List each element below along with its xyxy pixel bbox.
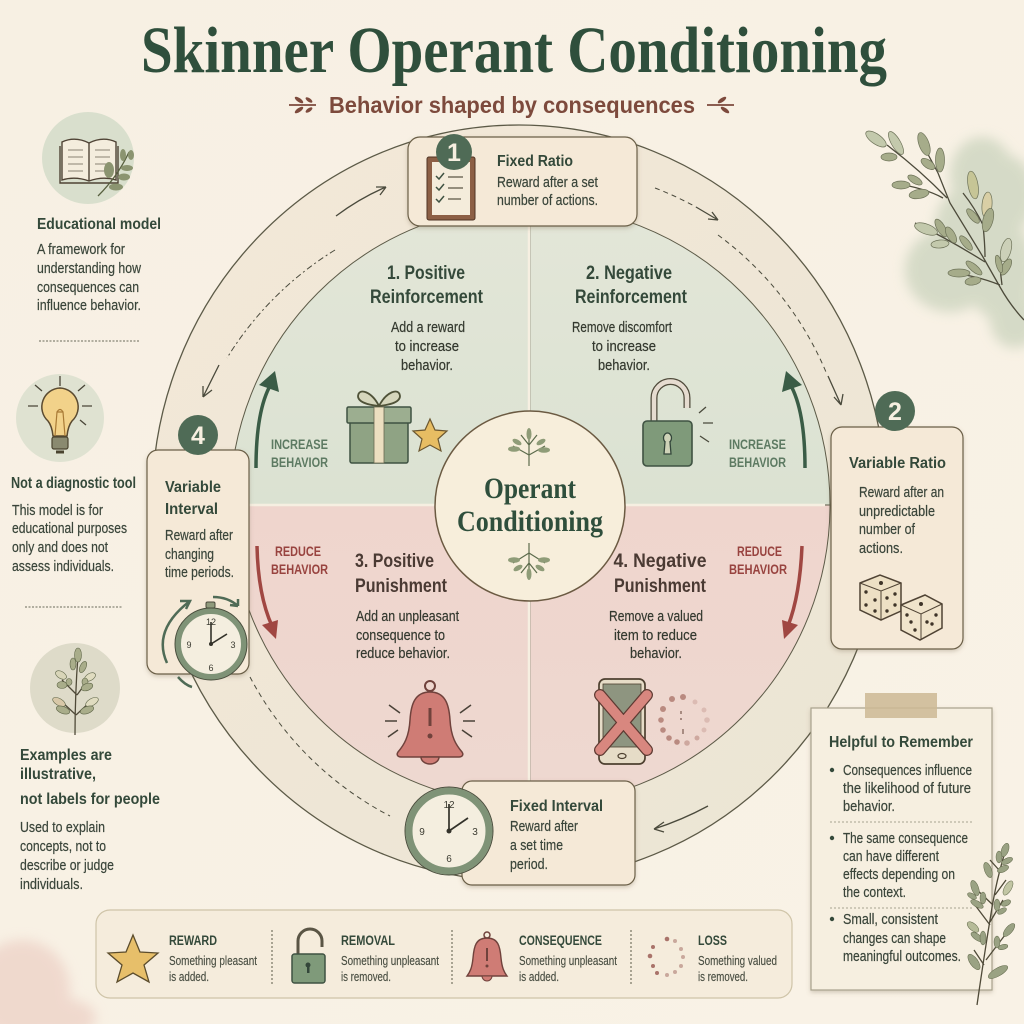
legend: reward: is added.	[169, 970, 209, 984]
card text: Reward after a set	[497, 175, 598, 191]
text: positive reinforcement: 1. Positive	[387, 263, 465, 284]
legend: consequence: Something unpleasant	[519, 954, 617, 968]
labels: reduce behavior left	[271, 544, 328, 577]
legend: loss	[648, 933, 777, 984]
text: positive punishment: reduce behavior.	[356, 646, 450, 662]
ring dashed paths and arrows	[203, 187, 843, 832]
text block: A framework for	[37, 242, 125, 258]
text block: educational purposes	[12, 521, 127, 537]
labels: increase behavior right: BEHAVIOR	[729, 455, 786, 470]
step badge 2: 2	[888, 398, 902, 426]
bullet 1: Consequences influence	[843, 763, 972, 779]
step badge 4: 4	[191, 422, 205, 450]
labels: increase behavior right	[729, 437, 786, 470]
heading: Educational model	[37, 216, 161, 233]
icon: gift box	[347, 391, 411, 463]
watercolor wash: top right	[905, 137, 1024, 348]
quadrant: positive reinforcement	[230, 205, 530, 505]
text: negative reinforcement: to increase	[592, 339, 656, 355]
legend: loss: is removed.	[698, 970, 748, 984]
legend: loss: Something valued	[698, 954, 777, 968]
quadrant: negative reinforcement	[530, 205, 830, 505]
text: negative punishment: behavior.	[630, 646, 682, 662]
center circle	[435, 411, 625, 601]
icon: sprig	[965, 842, 1017, 1005]
text block	[37, 242, 141, 314]
legend bar	[96, 910, 792, 998]
card text: unpredictable	[859, 504, 935, 520]
card: fixed interval	[405, 781, 635, 885]
panel: helpful to remember	[811, 693, 1017, 1005]
bullet 2: effects depending on	[843, 867, 955, 883]
bullet 2: the context.	[843, 885, 906, 901]
card text: time periods.	[165, 565, 234, 581]
text block: concepts, not to	[20, 839, 106, 855]
text block: assess individuals.	[12, 559, 114, 575]
legend: removal: is removed.	[341, 970, 391, 984]
watercolor wash: bottom left	[0, 940, 96, 1024]
card text: Fixed Interval	[510, 798, 603, 815]
panel: educational model	[37, 112, 161, 314]
bullet 1	[830, 763, 972, 815]
icon: clipboard	[427, 157, 475, 220]
text: positive reinforcement: Add a reward	[391, 320, 465, 336]
legend: reward: REWARD	[169, 933, 217, 948]
center heading	[457, 472, 603, 538]
card text: actions.	[859, 541, 903, 557]
text block: consequences can	[37, 280, 139, 296]
text: positive reinforcement: Reinforcement	[370, 287, 484, 308]
icon: stopwatch with arrows: 9	[186, 640, 192, 650]
icon: clock: 3	[472, 827, 478, 838]
text block	[20, 820, 114, 893]
step badge 2	[875, 391, 915, 431]
bullet 3: changes can shape	[843, 931, 946, 947]
arrow: increase right	[782, 371, 805, 468]
legend: consequence: is added.	[519, 970, 559, 984]
icon: warning bell	[385, 681, 475, 764]
heading: illustrative,	[20, 766, 96, 783]
card: variable ratio	[831, 391, 963, 649]
arrow: increase left	[256, 371, 279, 468]
bullet 3: Small, consistent	[843, 912, 938, 928]
text: positive punishment: consequence to	[356, 628, 445, 644]
text block: describe or judge	[20, 858, 114, 874]
bullet 1: the likelihood of future	[843, 781, 971, 797]
text: positive reinforcement	[370, 263, 484, 374]
text block: individuals.	[20, 877, 83, 893]
heading: Not a diagnostic tool	[11, 475, 136, 492]
card text	[849, 455, 946, 557]
labels: increase behavior left	[271, 437, 328, 470]
legend: removal	[292, 929, 439, 984]
icon: stopwatch with arrows: 3	[230, 640, 236, 650]
icon: crossed out phone	[599, 679, 647, 764]
sprig top	[508, 428, 550, 466]
icon: clock: 9	[419, 827, 425, 838]
legend: removal: REMOVAL	[341, 933, 395, 948]
icon: stopwatch with arrows: 12	[206, 617, 216, 627]
card text: Reward after an	[859, 485, 944, 501]
labels: reduce behavior right: REDUCE	[737, 544, 782, 559]
card text: number of actions.	[497, 193, 598, 209]
labels: reduce behavior right: BEHAVIOR	[729, 562, 787, 577]
heading: not labels for people	[20, 791, 160, 808]
card text	[497, 153, 598, 209]
card text: Interval	[165, 501, 218, 518]
text: negative reinforcement: behavior.	[598, 358, 650, 374]
card: fixed ratio	[408, 134, 637, 226]
icon: dice	[860, 575, 942, 640]
icon: open book with sprig	[42, 112, 134, 204]
quadrant: negative punishment	[530, 505, 830, 805]
step badge 4	[178, 415, 218, 455]
text: positive punishment: Punishment	[355, 576, 448, 597]
center heading: Operant	[484, 472, 576, 505]
text: negative punishment: item to reduce	[614, 628, 697, 644]
icon: fading dots circle	[658, 694, 710, 746]
text block: influence behavior.	[37, 298, 141, 314]
quadrant: positive punishment	[230, 505, 530, 805]
text: positive punishment: 3. Positive	[355, 551, 434, 572]
text block: understanding how	[37, 261, 141, 277]
title: Skinner Operant Conditioning	[141, 14, 887, 87]
text: negative punishment: 4. Negative	[614, 551, 706, 572]
legend: consequence	[467, 932, 617, 984]
text: negative punishment: Punishment	[614, 576, 707, 597]
legend: reward: Something pleasant	[169, 954, 257, 968]
text block: Used to explain	[20, 820, 105, 836]
card text: Variable Ratio	[849, 455, 946, 472]
text: negative reinforcement: 2. Negative	[586, 263, 672, 284]
bullet 1: behavior.	[843, 799, 895, 815]
text block: only and does not	[12, 540, 108, 556]
icon: light bulb	[16, 374, 104, 462]
bullet 3: meaningful outcomes.	[843, 949, 961, 965]
icon: open padlock	[643, 382, 713, 466]
labels: reduce behavior right	[729, 544, 787, 577]
card text	[510, 798, 603, 873]
legend: consequence: CONSEQUENCE	[519, 933, 602, 948]
text: negative reinforcement: Reinforcement	[575, 287, 688, 308]
legend: removal: Something unpleasant	[341, 954, 439, 968]
bullet 3	[830, 912, 961, 965]
card text: Reward after	[510, 819, 578, 835]
card: variable interval	[147, 415, 249, 687]
heading: Examples are	[20, 747, 112, 764]
heading	[20, 747, 160, 808]
labels: reduce behavior left: BEHAVIOR	[271, 562, 328, 577]
text block: This model is for	[12, 503, 103, 519]
card text	[165, 479, 234, 581]
icon: clock	[405, 787, 493, 875]
heading: Helpful to Remember	[829, 734, 973, 751]
bullet 2: The same consequence	[843, 831, 968, 847]
icon: star	[413, 419, 447, 451]
icon: plant	[30, 643, 120, 735]
center heading: Conditioning	[457, 505, 603, 538]
card text: a set time	[510, 838, 563, 854]
text: positive reinforcement: behavior.	[401, 358, 453, 374]
arrow: reduce right	[782, 546, 802, 639]
step badge 1: 1	[447, 139, 461, 167]
card text: changing	[165, 547, 214, 563]
bullet 2: can have different	[843, 849, 939, 865]
labels: reduce behavior left: REDUCE	[275, 544, 321, 559]
arrow: reduce left	[257, 546, 278, 639]
legend: reward	[108, 933, 257, 984]
card text: period.	[510, 857, 548, 873]
panel: not a diagnostic tool	[11, 374, 136, 575]
text: negative reinforcement	[572, 263, 688, 374]
panel: examples are illustrative	[20, 643, 160, 893]
text: positive reinforcement: to increase	[395, 339, 459, 355]
icon: stopwatch with arrows: 6	[208, 663, 214, 673]
legend: loss: LOSS	[698, 933, 727, 948]
text: positive punishment	[355, 551, 459, 662]
branch illustration: top right	[863, 128, 1024, 320]
card text: Fixed Ratio	[497, 153, 573, 170]
labels: increase behavior left: BEHAVIOR	[271, 455, 328, 470]
outer ring	[152, 125, 886, 881]
card text: Variable	[165, 479, 221, 496]
labels: increase behavior left: INCREASE	[271, 437, 328, 452]
icon: stopwatch with arrows	[163, 597, 247, 687]
text: negative punishment	[609, 551, 707, 662]
text: positive punishment: Add an unpleasant	[356, 609, 459, 625]
icon: clock: 6	[446, 854, 452, 865]
sprig bottom	[508, 543, 550, 580]
card text: number of	[859, 522, 916, 538]
bullet 2	[830, 831, 968, 901]
text: negative punishment: Remove a valued	[609, 609, 703, 625]
card text: Reward after	[165, 528, 233, 544]
text: negative reinforcement: Remove discomfort	[572, 320, 672, 336]
text block	[12, 503, 127, 575]
step badge 1	[436, 134, 472, 170]
subtitle with ornaments: Behavior shaped by consequences	[329, 92, 695, 118]
tape	[865, 693, 937, 718]
labels: increase behavior right: INCREASE	[729, 437, 786, 452]
icon: clock: 12	[443, 800, 455, 811]
